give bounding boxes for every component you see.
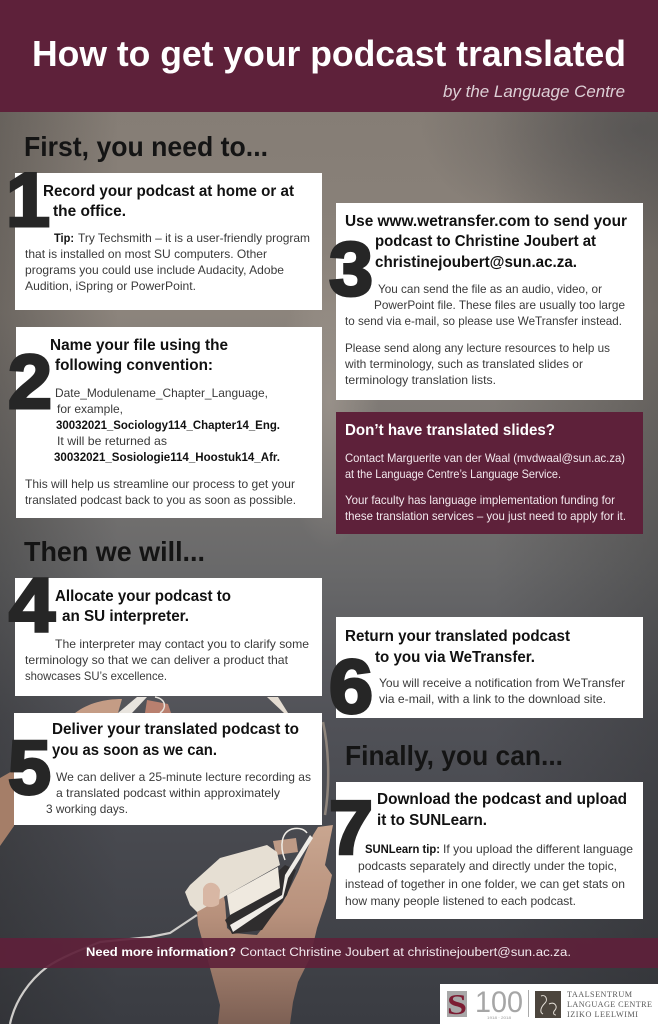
step 3 number: 3 bbox=[329, 227, 373, 312]
heading: Then we will: Then we will... bbox=[24, 536, 205, 567]
panel: step 6: via e-mail, with a link to the download site. bbox=[379, 693, 606, 706]
language centre text: TAALSENTRUM bbox=[567, 990, 633, 999]
footer band: more information bbox=[0, 938, 658, 968]
panel: step 2: for example, bbox=[57, 403, 123, 416]
panel: step 6: Return your translated podcast bbox=[345, 628, 571, 645]
title: How to get your podcast translated bbox=[32, 33, 626, 74]
icon: S100 crest: 100 bbox=[475, 986, 523, 1019]
panel: step 4 bbox=[9, 563, 322, 696]
panel: step 7: SUNLearn tip: bbox=[365, 843, 440, 856]
panel: step 5 bbox=[8, 713, 322, 825]
panel: step 2: translated podcast back to you as soon as possible. bbox=[25, 494, 296, 507]
panel: step 5: a translated podcast within approximately bbox=[56, 787, 280, 800]
panel: step 7 bbox=[329, 782, 643, 919]
panel: step 2: It will be returned as bbox=[57, 435, 167, 448]
panel: step 7: podcasts separately and directly under the topic, bbox=[358, 860, 617, 873]
panel: step 3: PowerPoint file. These files are usually too large bbox=[374, 299, 625, 312]
heading: Finally, you can: Finally, you can... bbox=[345, 740, 563, 771]
panel: step 6: to you via WeTransfer. bbox=[375, 649, 535, 666]
step 4 number: 4 bbox=[9, 563, 55, 648]
panel: step 7: how many people listened to each podcast. bbox=[345, 895, 576, 908]
language centre text: IZIKO LEELWIMI bbox=[567, 1010, 638, 1019]
panel: step 3: to send via e-mail, so please use WeTransfer instead. bbox=[345, 315, 622, 328]
panel: step 5: you as soon as we can. bbox=[52, 742, 217, 759]
panel: step 1: Audition, iSpring or PowerPoint. bbox=[25, 280, 196, 293]
panel: step 1: Record your podcast at home or at bbox=[43, 183, 295, 200]
panel: step 3: You can send the file as an audio, video, or bbox=[378, 283, 602, 296]
panel: step 7: it to SUNLearn. bbox=[377, 812, 487, 829]
step 6 number: 6 bbox=[329, 645, 373, 730]
heading: First, you need to: First, you need to... bbox=[24, 131, 268, 162]
icon: S100 crest: 1918 · 2018 bbox=[487, 1015, 512, 1020]
panel: step 2: Name your file using the bbox=[50, 337, 228, 354]
panel: step 2: following convention: bbox=[55, 357, 213, 374]
panel: step 6 bbox=[329, 617, 643, 730]
step 7 number: 7 bbox=[329, 786, 373, 871]
panel: step 3: with terminology, such as translated slides or bbox=[344, 358, 583, 371]
header band bbox=[0, 0, 658, 112]
panel: step 3: Please send along any lecture resources to help us bbox=[345, 342, 610, 355]
icon: S100 crest bbox=[447, 986, 523, 1021]
logo strip bbox=[440, 984, 658, 1024]
panel: don't have translated slides: Contact Marguerite van der Waal (mvdwaal@sun.ac.za) bbox=[345, 452, 625, 465]
panel: step 7: instead of together in one folder, we can get stats on bbox=[345, 878, 625, 891]
panel: step 3: podcast to Christine Joubert at bbox=[375, 233, 597, 250]
panel: step 6: You will receive a notification from WeTransfer bbox=[379, 677, 625, 690]
panel: step 2: This will help us streamline our process to get your bbox=[25, 478, 295, 491]
step 5 number: 5 bbox=[8, 726, 51, 811]
panel: step 5: Deliver your translated podcast to bbox=[52, 721, 299, 738]
panel: step 1 bbox=[6, 158, 322, 310]
panel: step 1: Try Techsmith – it is a user-friendly program bbox=[78, 232, 310, 245]
panel: step 4: Allocate your podcast to bbox=[55, 588, 231, 605]
panel: don't have translated slides: Your faculty has language implementation funding for bbox=[345, 494, 615, 507]
panel: step 2: 30032021_Sociology114_Chapter14_Eng. bbox=[56, 419, 280, 432]
subtitle: by the Language Centre bbox=[443, 82, 625, 101]
footer band: more information: Contact Christine Joubert at christinejoubert@sun.ac.za. bbox=[240, 945, 571, 959]
panel: step 5: 3 working days. bbox=[46, 803, 128, 816]
panel: step 3 bbox=[329, 203, 643, 400]
panel: don't have translated slides: Don’t have translated slides? bbox=[345, 422, 555, 439]
panel: step 1: the office. bbox=[53, 203, 126, 220]
panel: step 4: showcases SU’s excellence. bbox=[25, 670, 167, 683]
icon: S100 crest: S bbox=[447, 990, 467, 1021]
panel: step 1: Tip: bbox=[54, 232, 74, 245]
panel: step 4: terminology so that we can deliver a product that bbox=[25, 654, 289, 667]
panel: step 3: Use www.wetransfer.com to send your bbox=[345, 213, 627, 230]
panel: step 1: programs you could use include Audacity, Adobe bbox=[25, 264, 284, 277]
step 1 number: 1 bbox=[6, 158, 50, 243]
language centre text: LANGUAGE CENTRE bbox=[567, 1000, 652, 1009]
panel: step 5: We can deliver a 25-minute lecture recording as bbox=[56, 771, 311, 784]
panel: don't have translated slides: at the Language Centre’s Language Service. bbox=[345, 468, 561, 481]
icon: language centre head bbox=[535, 991, 561, 1018]
panel: step 7: If you upload the different language bbox=[443, 843, 633, 856]
step 2 number: 2 bbox=[8, 340, 52, 425]
footer band: more information: Need more information? bbox=[86, 945, 236, 959]
panel: don't have translated slides bbox=[336, 412, 643, 534]
panel: step 2 bbox=[8, 327, 322, 518]
panel: step 4: The interpreter may contact you to clarify some bbox=[55, 638, 309, 651]
panel: step 1: that is installed on most SU computers. Other bbox=[25, 248, 267, 261]
panel: step 3: terminology translation lists. bbox=[345, 374, 496, 387]
panel: step 2: Date_Modulename_Chapter_Language, bbox=[55, 387, 268, 400]
panel: don't have translated slides: these translation services – you just need to apply for it. bbox=[345, 510, 626, 523]
panel: step 4: an SU interpreter. bbox=[62, 608, 189, 625]
panel: step 7: Download the podcast and upload bbox=[377, 791, 627, 808]
language centre text bbox=[567, 990, 652, 1019]
panel: step 2: 30032021_Sosiologie114_Hoostuk14_Afr. bbox=[54, 451, 280, 464]
panel: step 3: christinejoubert@sun.ac.za. bbox=[375, 254, 577, 271]
